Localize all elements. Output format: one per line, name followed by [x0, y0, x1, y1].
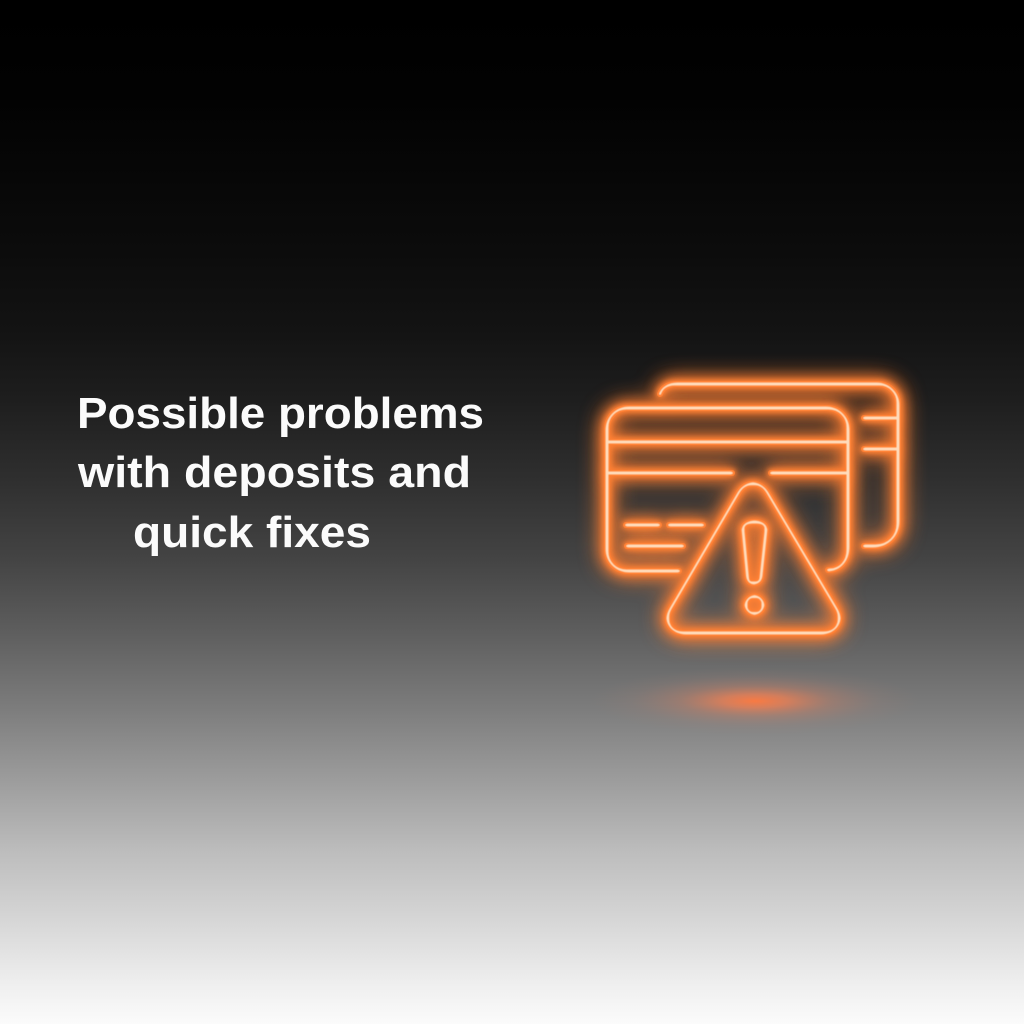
title: quick fixes: [133, 508, 371, 557]
title: Possible problems: [77, 389, 484, 438]
title: [77, 389, 484, 557]
reflection glow under icon: [590, 667, 920, 735]
exclamation mark: [743, 522, 766, 583]
front card: [607, 408, 848, 571]
back card: [660, 384, 898, 546]
title: with deposits and: [77, 448, 471, 497]
icon: neon cards with warning triangle: [607, 384, 898, 633]
warning triangle: [668, 484, 839, 633]
exclamation dot: [746, 596, 763, 614]
